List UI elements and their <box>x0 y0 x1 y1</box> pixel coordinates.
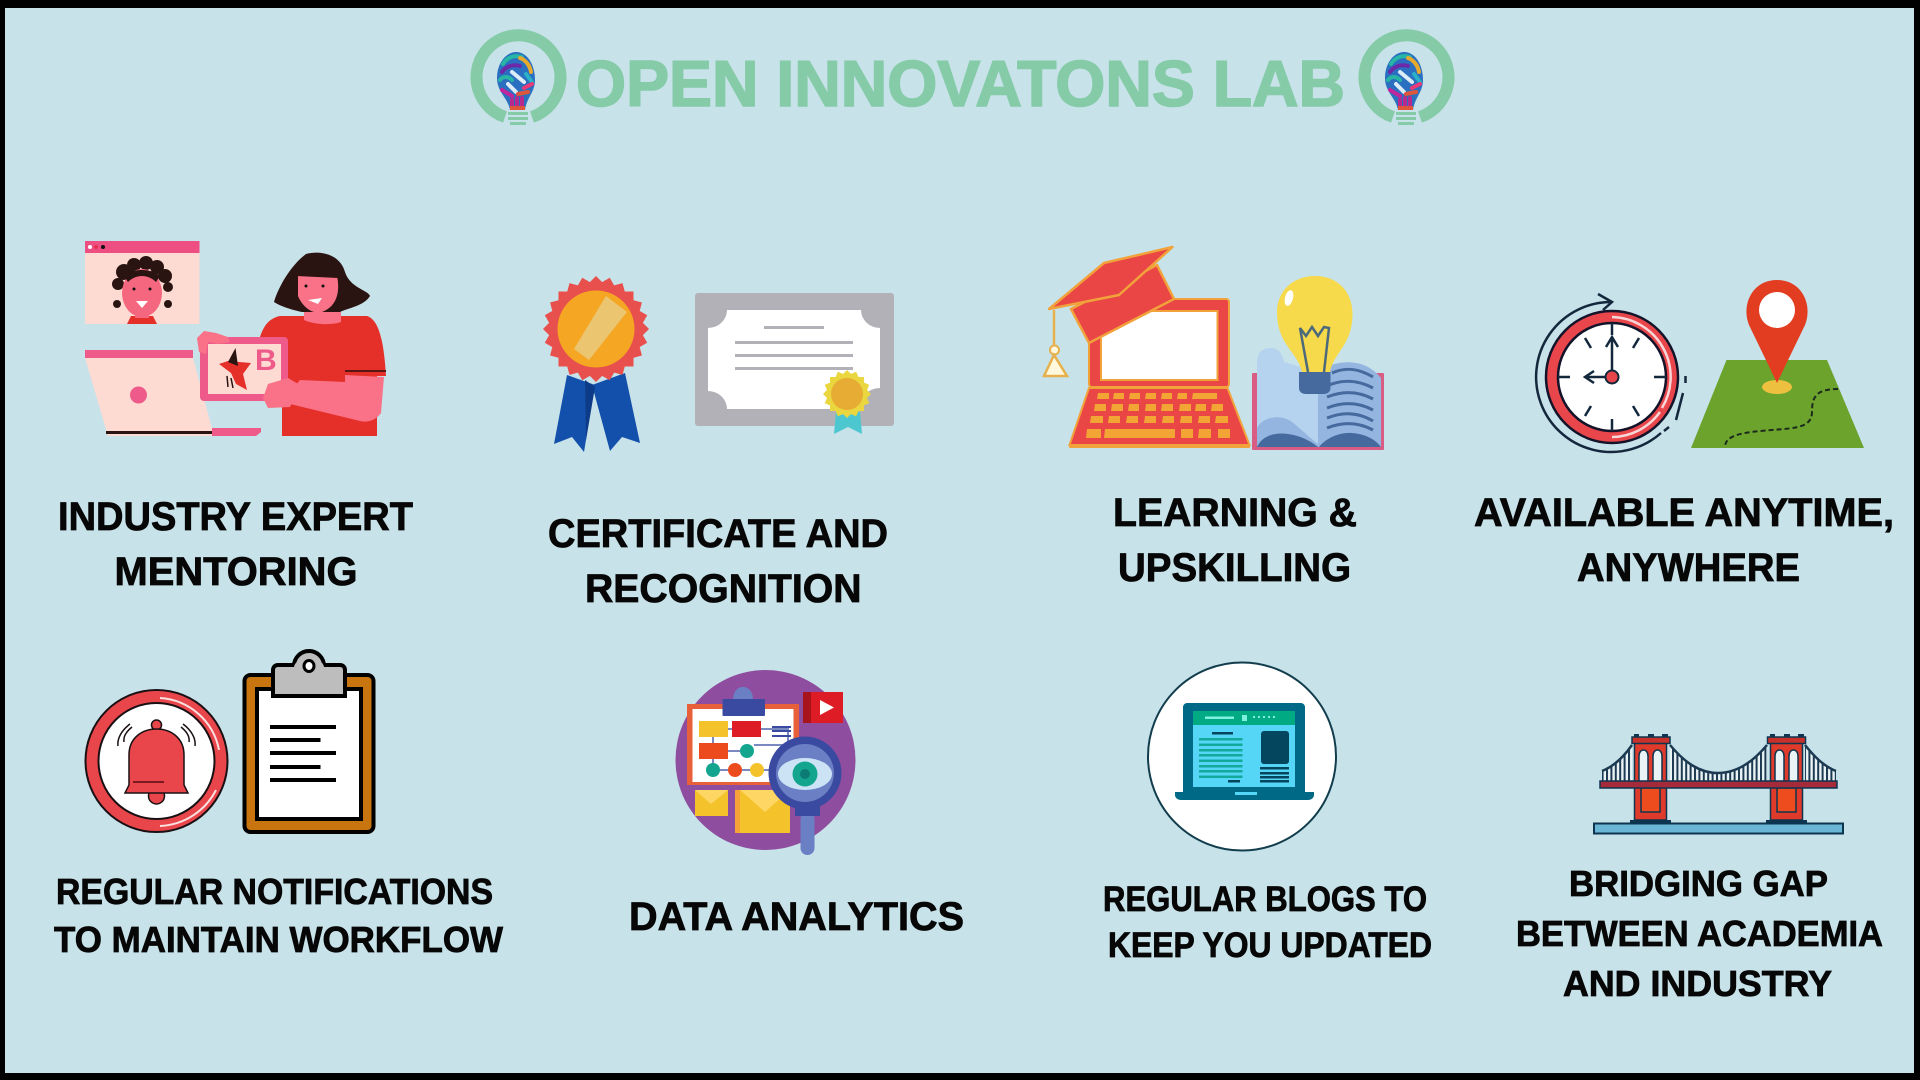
label <box>1474 491 1894 590</box>
label: LEARNING & <box>1113 491 1357 535</box>
panel: regular notifications <box>54 651 503 960</box>
icon: rosette ribbon <box>543 276 649 452</box>
icon: clipboard <box>244 651 374 832</box>
icon: online mentor illustration: B <box>255 344 277 377</box>
label: UPSKILLING <box>1118 546 1351 590</box>
label: ANYWHERE <box>1577 546 1800 590</box>
icon: map pin <box>1691 280 1864 448</box>
panel: learning and upskilling <box>1044 247 1384 590</box>
icon: laptop with graduation cap <box>1044 247 1250 448</box>
icon: lightbulb and open book <box>1252 276 1384 450</box>
icon: online mentor illustration <box>85 241 386 436</box>
panel: industry expert mentoring <box>58 241 413 594</box>
label: KEEP YOU UPDATED <box>1108 926 1432 965</box>
label: BRIDGING GAP <box>1569 863 1828 904</box>
label <box>54 871 503 960</box>
left hand holding tablet <box>197 331 230 354</box>
label <box>58 495 413 594</box>
label <box>548 512 888 611</box>
label: TO MAINTAIN WORKFLOW <box>54 919 503 960</box>
title: OPEN INNOVATONS LAB <box>576 47 1345 120</box>
icon: certificate <box>695 293 894 434</box>
label: RECOGNITION <box>585 567 862 611</box>
label: INDUSTRY EXPERT <box>58 495 413 539</box>
label: MENTORING <box>114 550 358 594</box>
icon: analytics circle with magnifier <box>676 670 856 855</box>
label: AND INDUSTRY <box>1563 963 1832 1004</box>
label: REGULAR NOTIFICATIONS <box>56 871 493 912</box>
icon: bell <box>86 690 228 832</box>
label: DATA ANALYTICS <box>629 895 964 939</box>
bird on tablet <box>219 348 251 390</box>
label <box>1103 880 1432 965</box>
icon: suspension bridge <box>1594 734 1843 834</box>
label <box>1113 491 1357 590</box>
label: AVAILABLE ANYTIME, <box>1474 491 1894 535</box>
panel: data analytics <box>629 670 964 939</box>
icon: right colourful bulb logo <box>1364 35 1448 125</box>
panel: available anytime, anywhere <box>1474 280 1894 590</box>
label: REGULAR BLOGS TO <box>1103 880 1427 919</box>
panel: bridging gap <box>1516 734 1883 1004</box>
label <box>1516 863 1883 1004</box>
label: CERTIFICATE AND <box>548 512 888 556</box>
panel: certificate and recognition <box>543 276 894 611</box>
panel: regular blogs <box>1103 662 1432 965</box>
icon: blog on laptop <box>1148 662 1336 850</box>
label: BETWEEN ACADEMIA <box>1516 913 1883 954</box>
icon: clock <box>1536 294 1686 452</box>
header: logo and title <box>476 35 1448 125</box>
icon: left colourful bulb logo <box>476 35 560 125</box>
